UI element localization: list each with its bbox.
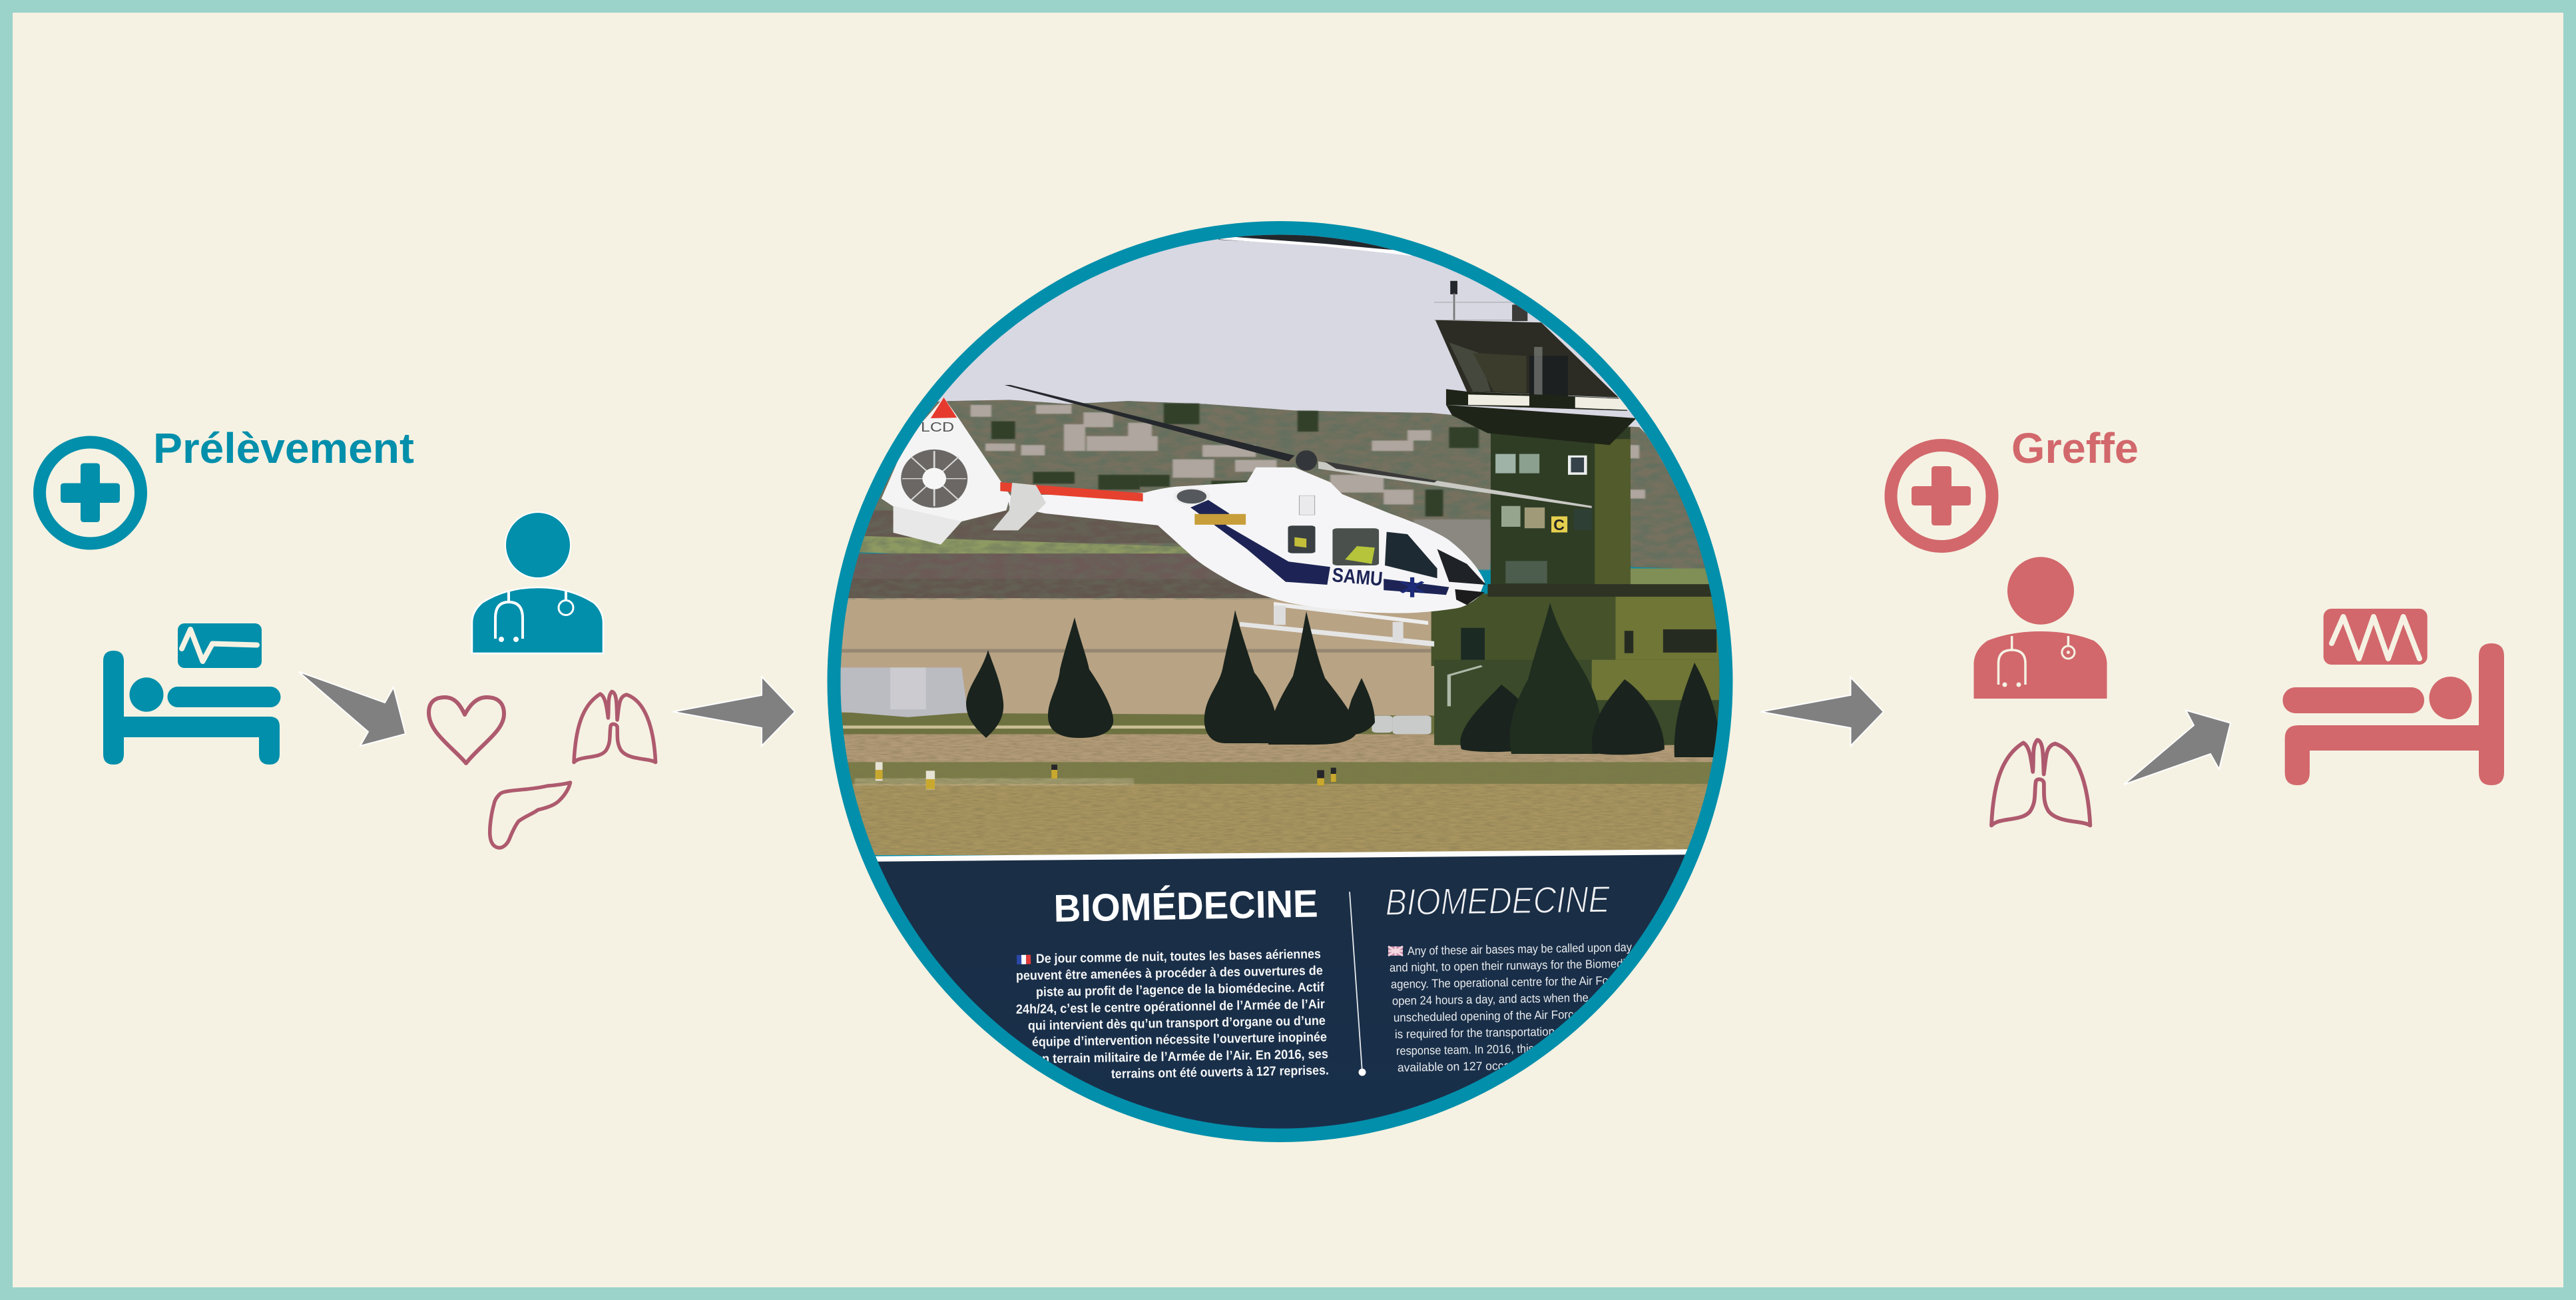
control tower [1431,281,1734,692]
caption paragraph: French: qui intervient dès qu’un transport d’organe ou d’une [1028,1014,1326,1033]
runway markers [876,762,1336,789]
caption paragraph: French: un terrain militaire de l’Armée de l’Air. En 2016, ses [1035,1047,1328,1066]
icon: heart organ [429,697,504,763]
caption paragraph: French: 24h/24, c’est le centre opérationnel de l’Armée de l’Air [1016,997,1325,1017]
photo: SAMU helicopter at air base with Biomédecine caption [840,234,1719,1128]
tower base continuation [1434,660,1751,745]
skids [1274,602,1428,625]
tail boom and fuselage [1008,468,1485,613]
arrow: lungs to recipient [2124,710,2230,785]
caption title: English: BIOMEDECINE [1385,878,1611,923]
caption paragraph: English: Any of these air bases may be called upon day [1408,940,1632,958]
flag: United Kingdom [1388,946,1403,956]
caption paragraph: French [1016,947,1329,1082]
helicopter [882,385,1592,647]
icon: medical cross in circle (prélèvement) [40,442,141,543]
arrow: organs to transport [673,677,795,746]
caption paragraph: French: piste au profit de l’agence de la biomédecine. Actif [1036,980,1324,1000]
text on tail: LCD: LCD [921,420,954,435]
icon: lungs organ (donor) [574,691,656,763]
caption paragraph: English: available on 127 occasions. [1398,1058,1541,1074]
photo sky [895,234,1665,466]
caption paragraph: French: terrains ont été ouverts à 127 reprises. [1111,1063,1329,1082]
flag: France [1017,955,1031,964]
icon: liver organ [490,783,570,848]
caption paragraph: French: équipe d’intervention nécessite l’ouverture inopinée [1032,1030,1327,1050]
foreground fields [819,666,1751,855]
photo upper scene drawn at zoom scale [837,281,1734,692]
icon: lungs organ (recipient) [1991,740,2090,826]
caption title: French: BIOMÉDECINE [1053,882,1318,930]
icon: medical cross in circle (greffe) [1891,445,1992,546]
caption paragraph: French: De jour comme de nuit, toutes les bases aériennes [1036,947,1321,966]
text on tower: C: C [1553,516,1565,533]
arrow: bed to organs [298,671,405,746]
panel: prélèvement heading [40,424,414,543]
grey hangar [831,667,967,717]
icon: doctor (greffe) [1973,557,2107,699]
caption divider [1350,892,1366,1076]
caption paragraph: English: open 24 hours a day, and acts when the [1392,991,1589,1008]
icon: doctor (prélèvement) [472,512,603,653]
navy stripes [1190,500,1330,585]
caption paragraph: English: agency. The operational centre for the Air Force [1391,974,1624,991]
photo lower scene drawn at zoom scale [819,660,1751,855]
hillside [855,398,1734,570]
text on helicopter: SAMU: SAMU [1331,564,1384,591]
caption paragraph: English: is required for the transportation of [1395,1024,1568,1041]
title: Greffe: Greffe [2011,424,2139,472]
panel: circular photo with teal ring [827,221,1732,1142]
windows [1288,525,1316,553]
icon: patient bed with monitor (recipient) [2282,609,2504,785]
caption paragraph: English [1390,940,1646,1074]
caption paragraph: English: response team. In 2016, this [1396,1042,1534,1058]
arrow: transport to graft [1761,677,1884,746]
main rotor [1005,385,1294,462]
distant fields [837,510,1734,685]
panel: greffe heading [1891,424,2139,546]
icon: patient bed with monitor (donor) [103,623,281,765]
title: Prélèvement: Prélèvement [153,424,414,472]
caption paragraph: English: and night, to open their runways for the Biomedicine [1390,956,1646,974]
caption panel [852,849,1711,1300]
caption paragraph: English: unscheduled opening of the Air Force [1394,1008,1580,1024]
caption paragraph: French: peuvent être amenées à procéder à des ouvertures de [1016,963,1323,983]
tail fin [882,398,1011,521]
rotor hub [1296,450,1317,471]
tree line [966,603,1721,757]
parked cars [1372,715,1431,734]
